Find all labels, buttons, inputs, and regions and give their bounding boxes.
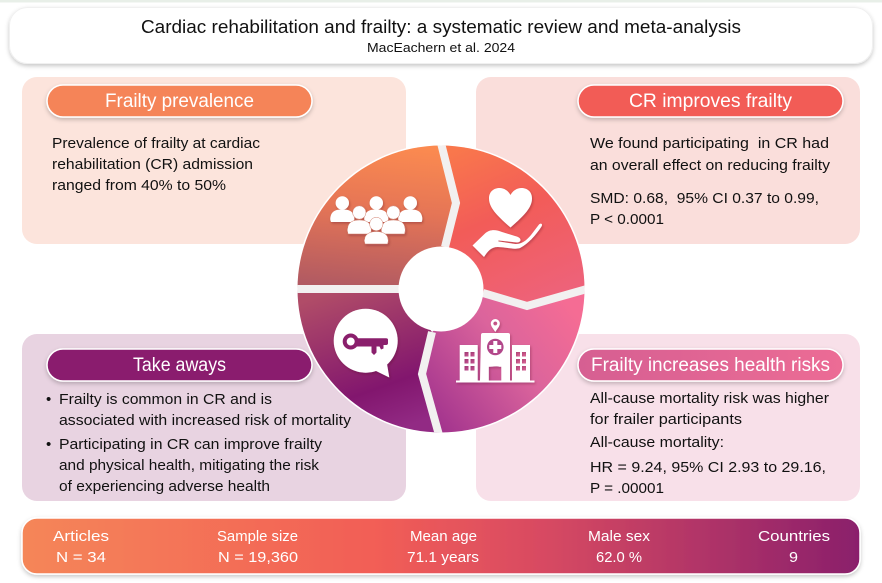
heading pill: CR improves frailty [578,85,843,117]
stat: countries: 9 [789,549,798,566]
gaps between segments [295,143,587,435]
hub [398,246,484,332]
heading pill: take aways: Take aways [133,355,226,376]
authors: MacEachern et al. 2024 [367,40,515,55]
panel: frailty increases health risks [476,334,860,501]
heading pill: frailty prevalence: Frailty prevalence [105,91,254,112]
text: CR effect: We found participating in CR had [590,135,829,152]
heading pill: health risks [578,349,843,381]
stat: sample size: N = 19,360 [218,549,298,566]
stat: sample size: Sample size [217,528,298,545]
text: prevalence [52,135,261,194]
text: health risks: All-cause mortality: [590,434,724,451]
stat: male sex: Male sex [588,528,651,545]
text: CR effect [590,135,831,228]
text: prevalence: Prevalence of frailty at cardiac [52,135,261,152]
panel: CR improves frailty [476,77,860,244]
heading pill: health risks: Frailty increases health risks [591,355,830,376]
stat: articles: Articles [53,528,109,545]
icon: key speech bubble [334,309,398,378]
summary band [22,518,860,574]
heading pill: CR improves frailty: CR improves frailty [629,91,792,112]
text: take aways list: • [46,391,51,408]
text: CR effect: P < 0.0001 [590,211,664,228]
title box [10,8,872,64]
icon: heart in hand [472,188,542,257]
stat: mean age: Mean age [410,528,477,545]
segment: bottom-right [422,289,585,433]
stat: sample size [217,528,298,566]
stat: articles [53,528,109,566]
stat: mean age: 71.1 years [407,549,479,566]
central wheel [295,143,587,435]
text: take aways list: Frailty is common in CR and is [59,391,272,408]
text: health risks: P = .00001 [590,480,664,497]
segment: bottom-left [297,289,438,433]
text: take aways list: Participating in CR can improve frailty [59,436,323,453]
text: health risks: for frailer participants [590,411,742,428]
text: take aways list: associated with increased risk of mortality [59,412,352,429]
segment: top-right [440,145,585,306]
title: Cardiac rehabilitation and frailty: a systematic review and meta-analysis [141,17,741,37]
stat: countries [758,528,830,566]
text: health risks: All-cause mortality risk was higher [590,390,829,407]
stat: mean age [407,528,479,566]
text: take aways list: • [46,436,51,453]
stat: articles: N = 34 [56,549,106,566]
text: CR effect: an overall effect on reducing frailty [590,157,831,174]
text: prevalence: rehabilitation (CR) admission [52,156,253,173]
text: health risks [590,390,829,497]
text: health risks: HR = 9.24, 95% CI 2.93 to 29.16, [590,459,826,476]
text: CR effect: SMD: 0.68, 95% CI 0.37 to 0.99, [590,190,819,207]
text: take aways list: of experiencing adverse health [59,478,270,495]
text: take aways list: and physical health, mitigating the risk [59,457,319,474]
top strip [0,0,882,2]
stat: male sex: 62.0 % [596,549,642,566]
icon: hospital [456,319,534,382]
stat: male sex [588,528,651,566]
segment: top-left [297,145,456,289]
text: take aways list [46,391,352,495]
text: prevalence: ranged from 40% to 50% [52,177,226,194]
panel: frailty prevalence [22,77,406,244]
heading pill: frailty prevalence [47,85,312,117]
heading pill: take aways [47,349,312,381]
icon: people group [330,196,422,244]
panel: take aways [22,334,406,501]
stat: countries: Countries [758,528,830,545]
